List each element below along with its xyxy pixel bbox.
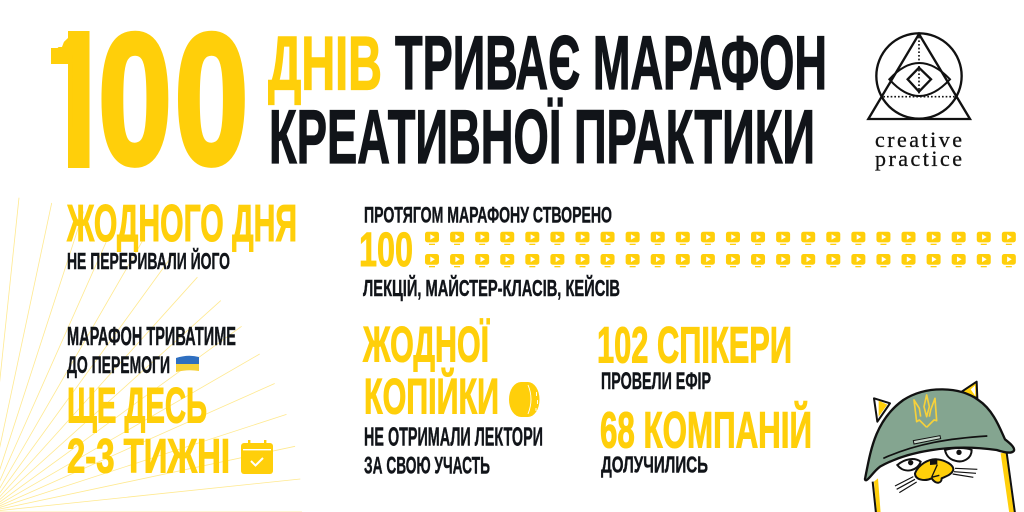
icon: calendar	[241, 440, 273, 474]
block: not a penny: КОПІЙКИ	[364, 368, 499, 424]
icon: Ukrainian flag	[176, 356, 199, 372]
logo: creative practice	[868, 33, 970, 171]
big number 100	[51, 30, 245, 168]
block: 68 companies: ДОЛУЧИЛИСЬ	[601, 452, 708, 478]
block: 102 speakers: 102 СПІКЕРИ	[597, 316, 792, 374]
background rays	[0, 198, 302, 512]
left block: marathon continues: ДО ПЕРЕМОГИ	[67, 352, 170, 379]
logo: creative practice: creative	[875, 127, 962, 152]
big number 100: 1	[42, 0, 112, 206]
block: 100 lectures: 100	[359, 224, 413, 277]
title	[268, 21, 827, 180]
block: 102 speakers	[597, 316, 792, 395]
block: 68 companies	[600, 400, 812, 478]
icon: coin	[509, 382, 540, 417]
title: ДНІВ	[268, 22, 382, 106]
icon grid: video lessons	[425, 232, 1016, 267]
block: not a penny: НЕ ОТРИМАЛИ ЛЕКТОРИ	[364, 424, 543, 452]
left block: no day missed: НЕ ПЕРЕРИВАЛИ ЙОГО	[67, 247, 230, 274]
left block: marathon continues: ЩЕ ДЕСЬ	[67, 378, 207, 434]
left block: marathon continues: МАРАФОН ТРИВАТИМЕ	[67, 323, 236, 351]
block: 102 speakers: ПРОВЕЛИ ЕФІР	[601, 368, 711, 395]
block: 68 companies: 68 КОМПАНІЙ	[600, 400, 812, 458]
left block: marathon continues	[67, 323, 273, 484]
block: not a penny: ЗА СВОЮ УЧАСТЬ	[364, 453, 490, 480]
block: not a penny: ЖОДНОЇ	[362, 316, 490, 372]
big number 100: 0	[98, 0, 172, 204]
left block: marathon continues: 2-3 ТИЖНІ	[67, 430, 230, 484]
illustration: cat in helmet	[865, 382, 1015, 512]
block: 100 lectures	[359, 202, 1016, 301]
left block: no day missed	[66, 195, 297, 274]
block: 100 lectures: ЛЕКЦІЙ, МАЙСТЕР-КЛАСІВ, КЕЙСІВ	[363, 274, 620, 301]
big number 100: 0	[174, 0, 248, 204]
block: not a penny	[362, 316, 543, 480]
logo: creative practice: practice	[875, 146, 962, 171]
left block: no day missed: ЖОДНОГО ДНЯ	[66, 195, 297, 253]
block: 100 lectures: ПРОТЯГОМ МАРАФОНУ СТВОРЕНО	[364, 202, 612, 228]
